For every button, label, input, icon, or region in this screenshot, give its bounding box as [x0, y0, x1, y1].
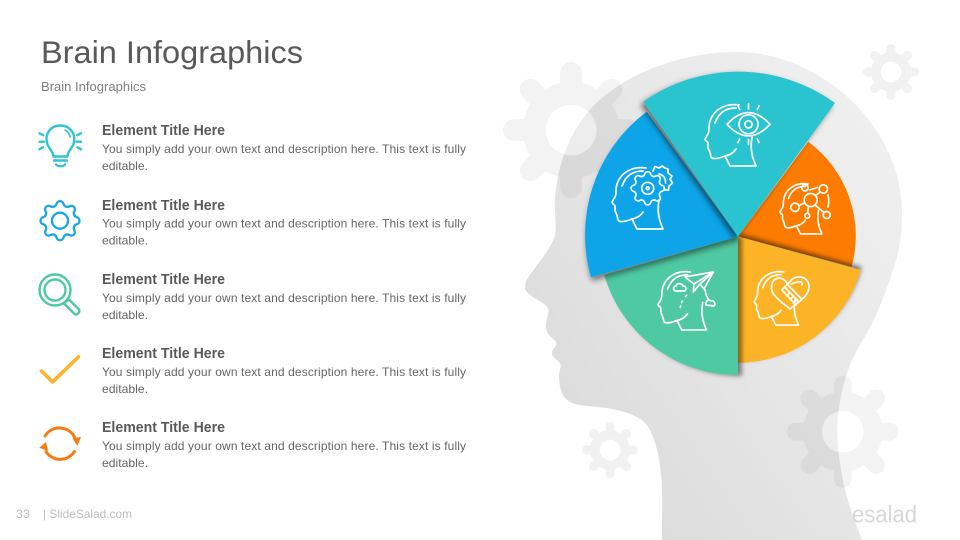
item description: You simply add your own text and description here. This text is fully [102, 142, 466, 156]
footer site: | SlideSalad.com [43, 507, 132, 521]
icon: head with network [780, 184, 830, 234]
head silhouette [525, 52, 902, 540]
pie wedge: orange [738, 142, 856, 267]
item description [102, 439, 466, 470]
icon: head with paper plane [658, 272, 715, 330]
background gear: top right [867, 48, 915, 96]
list item 1 [40, 123, 466, 173]
list item 3 [40, 272, 466, 322]
icon: head with gears [612, 166, 672, 229]
item title: Element Title Here [102, 123, 225, 139]
item title: Element Title Here [102, 198, 225, 214]
background gear: bottom right [796, 385, 890, 479]
list item 4 [42, 346, 466, 396]
pie wedge: green [604, 236, 738, 375]
item description: You simply add your own text and description here. This text is fully [102, 291, 466, 305]
list item 2 [40, 198, 466, 248]
item description: editable. [102, 456, 148, 470]
item description: editable. [102, 382, 148, 396]
title: Brain Infographics [41, 34, 303, 70]
item title: Element Title Here [102, 272, 225, 288]
pie wedge: teal [643, 72, 835, 236]
item description [102, 142, 466, 173]
pie wedge: yellow [738, 236, 861, 363]
item description [102, 291, 466, 322]
item description: You simply add your own text and description here. This text is fully [102, 365, 466, 379]
pie wedge: blue [585, 112, 738, 277]
list item 5 [39, 420, 466, 470]
item description: You simply add your own text and description here. This text is fully [102, 439, 466, 453]
item title: Element Title Here [102, 346, 225, 362]
item description [102, 217, 466, 248]
item description: editable. [102, 234, 148, 248]
background gear: bottom left [586, 426, 634, 474]
icon: head with heart hands [754, 272, 809, 325]
item description: editable. [102, 159, 148, 173]
icon: light bulb [40, 126, 81, 166]
item description: editable. [102, 308, 148, 322]
item description: You simply add your own text and description here. This text is fully [102, 217, 466, 231]
page number: 33 [16, 507, 30, 521]
background gear: top left [514, 73, 628, 187]
icon: head with eye [705, 104, 770, 166]
item title: Element Title Here [102, 420, 225, 436]
watermark: esalad [852, 502, 917, 528]
icon: check mark [42, 357, 78, 382]
icon: refresh arrows [39, 428, 81, 459]
item description [102, 365, 466, 396]
subtitle: Brain Infographics [41, 80, 146, 94]
icon: magnifier [40, 274, 79, 314]
icon: gear [40, 201, 80, 240]
